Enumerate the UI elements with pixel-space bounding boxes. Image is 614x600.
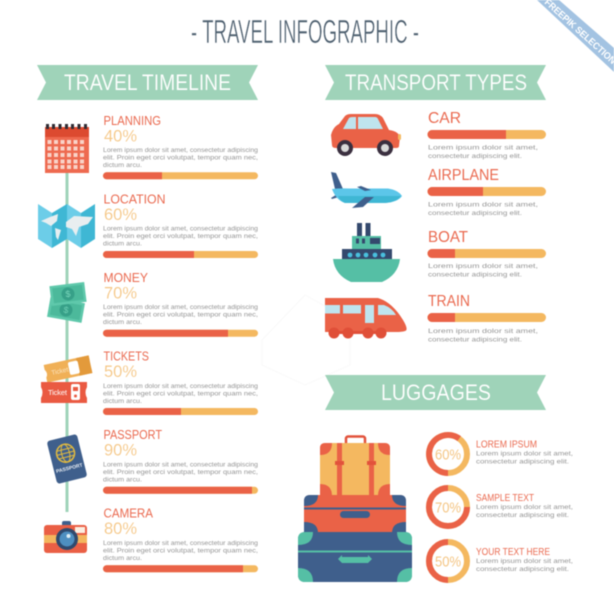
icon: train: [325, 298, 407, 338]
timeline item: location: elit. Proin eget orci volutpat, tempor quam nec,: [103, 233, 258, 240]
timeline item: passport: PASSPORT: [104, 427, 162, 442]
banner: luggages: LUGGAGES: [381, 380, 491, 405]
transport item: boat: Lorem ipsum dolor sit amet,: [428, 263, 538, 270]
icon: tickets: Ticket: [51, 366, 69, 377]
timeline item: tickets: TICKETS: [104, 349, 149, 364]
icon: tickets: Ticket: [48, 388, 68, 397]
label: sample text: [476, 493, 573, 519]
donut: 60%: [429, 435, 467, 473]
timeline item: planning: 40%: [104, 126, 137, 146]
label: your text here: [476, 547, 573, 573]
label: lorem ipsum: [476, 440, 573, 466]
label: lorem ipsum: consectetur adipiscing elit.: [476, 458, 569, 466]
banner: travel timeline: [37, 65, 258, 100]
timeline item: location: 60%: [104, 205, 137, 224]
timeline item: planning: dictum arcu.: [103, 162, 142, 169]
timeline item: camera: CAMERA: [104, 506, 153, 520]
donut: 70%: [429, 488, 467, 526]
transport item: boat: BOAT: [428, 229, 469, 246]
transport item: boat: consectetur adipiscing elit.: [428, 272, 522, 278]
timeline item: passport: elit. Proin eget orci volutpat, tempor quam nec,: [103, 469, 258, 476]
transport item: car: consectetur adipiscing elit.: [428, 153, 522, 160]
label: lorem ipsum: Lorem ipsum dolor sit amet,: [476, 450, 573, 458]
timeline item: money: elit. Proin eget orci volutpat, tempor quam nec,: [103, 312, 258, 319]
transport item: train: [428, 293, 546, 344]
label: your text here: Lorem ipsum dolor sit amet,: [476, 558, 573, 565]
donut: 70%: 70%: [435, 500, 461, 516]
transport item: car: CAR: [428, 110, 461, 127]
icon: luggage stack: [298, 436, 412, 582]
timeline item: camera: dictum arcu.: [103, 555, 142, 562]
timeline item: tickets: dictum arcu.: [103, 398, 142, 405]
timeline item: camera: elit. Proin eget orci volutpat, tempor quam nec,: [103, 548, 258, 554]
timeline item: money: [103, 270, 258, 337]
icon: boat: [333, 223, 400, 282]
timeline item: location: LOCATION: [104, 192, 166, 206]
transport item: train: consectetur adipiscing elit.: [428, 336, 522, 344]
icon: airplane: [331, 172, 402, 208]
label: your text here: consectetur adipiscing elit.: [476, 566, 569, 573]
banner: transport types: TRANSPORT TYPES: [345, 70, 527, 95]
timeline item: passport: dictum arcu.: [103, 476, 142, 483]
timeline item: passport: [103, 427, 258, 494]
timeline item: camera: [103, 506, 258, 572]
timeline item: passport: Lorem ipsum dolor sit amet, consectetur adipiscing: [103, 461, 258, 468]
donut: 50%: [429, 542, 467, 580]
transport item: train: TRAIN: [428, 293, 470, 310]
label: sample text: consectetur adipiscing elit.: [476, 512, 569, 519]
transport item: airplane: Lorem ipsum dolor sit amet,: [428, 202, 538, 208]
transport item: boat: [428, 229, 546, 278]
timeline item: planning: PLANNING: [104, 113, 161, 128]
timeline item: tickets: [103, 349, 258, 415]
timeline item: planning: elit. Proin eget orci volutpat, tempor quam nec,: [103, 154, 258, 162]
transport item: car: Lorem ipsum dolor sit amet,: [428, 144, 538, 152]
timeline item: camera: 80%: [104, 519, 137, 538]
timeline item: tickets: elit. Proin eget orci volutpat, tempor quam nec,: [103, 390, 258, 397]
icon: passport: [47, 434, 87, 484]
icon: money: $: [65, 289, 71, 299]
label: sample text: SAMPLE TEXT: [476, 493, 534, 504]
label: your text here: YOUR TEXT HERE: [476, 547, 550, 558]
timeline item: tickets: 50%: [104, 362, 137, 381]
label: lorem ipsum: LOREM IPSUM: [476, 440, 537, 450]
transport item: airplane: [428, 167, 546, 217]
banner: luggages: [325, 375, 546, 410]
transport item: car: [428, 110, 546, 160]
timeline item: passport: 90%: [104, 440, 137, 460]
timeline item: planning: Lorem ipsum dolor sit amet, consectetur adipiscing: [103, 147, 258, 154]
label: sample text: Lorem ipsum dolor sit amet,: [476, 504, 573, 511]
icon: money: $: [63, 305, 69, 315]
timeline item: money: dictum arcu.: [103, 319, 142, 326]
transport item: train: Lorem ipsum dolor sit amet,: [428, 328, 538, 335]
banner: travel timeline: TRAVEL TIMELINE: [64, 70, 231, 95]
timeline item: camera: Lorem ipsum dolor sit amet, consectetur adipiscing: [103, 540, 258, 547]
donut: 50%: 50%: [435, 554, 461, 570]
transport item: airplane: AIRPLANE: [428, 167, 499, 184]
timeline item: location: Lorem ipsum dolor sit amet, consectetur adipiscing: [103, 226, 258, 233]
icon: camera: [44, 521, 87, 553]
donut: 60%: 60%: [435, 448, 461, 464]
timeline item: money: Lorem ipsum dolor sit amet, consectetur adipiscing: [103, 304, 258, 311]
icon: tickets: [41, 355, 92, 403]
transport item: airplane: consectetur adipiscing elit.: [428, 210, 522, 217]
timeline item: location: dictum arcu.: [103, 241, 142, 248]
title: - TRAVEL INFOGRAPHIC -: [191, 13, 419, 50]
icon: calendar: [45, 124, 89, 173]
icon: car: [331, 114, 401, 156]
icon: passport: PASSPORT: [56, 463, 83, 475]
icon: money: [47, 282, 87, 323]
timeline item: location: [103, 192, 258, 258]
timeline item: money: MONEY: [104, 270, 148, 285]
timeline item: money: 70%: [104, 284, 137, 302]
timeline line: [66, 172, 68, 512]
icon: map: [38, 204, 95, 248]
timeline item: planning: [103, 113, 258, 179]
timeline item: tickets: Lorem ipsum dolor sit amet, consectetur adipiscing: [103, 383, 258, 390]
banner: transport types: [325, 65, 546, 100]
